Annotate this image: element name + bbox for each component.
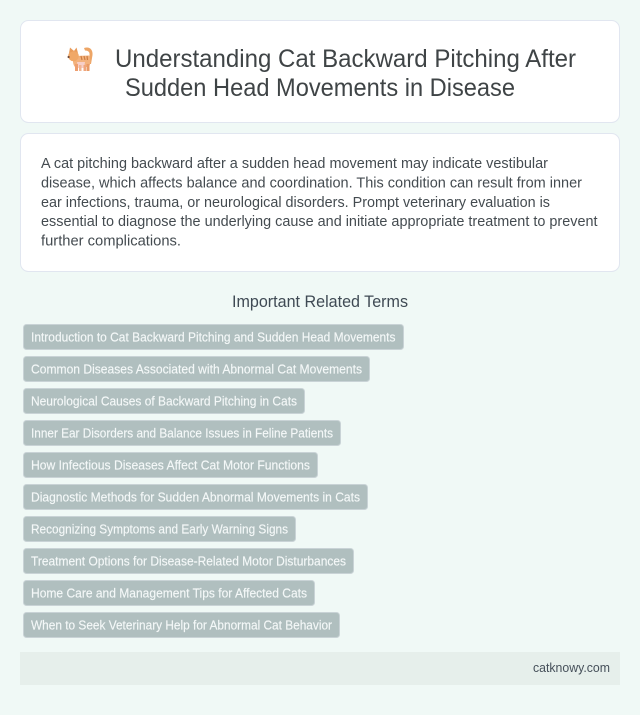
- term 8: Treatment Options for Disease-Related Motor Disturbances: [31, 554, 346, 568]
- term 10: [24, 612, 340, 638]
- term 5: How Infectious Diseases Affect Cat Motor Functions: [31, 458, 310, 472]
- text block: description: essential to diagnose the underlying cause and initiate appropriate treatment to prevent: [41, 213, 598, 230]
- icon: orange cat: [68, 47, 93, 71]
- term 6: Diagnostic Methods for Sudden Abnormal Movements in Cats: [31, 490, 360, 504]
- term 10: When to Seek Veterinary Help for Abnormal Cat Behavior: [31, 618, 333, 632]
- term 6: [24, 484, 368, 510]
- list: related terms: [24, 324, 404, 638]
- panel: title card: [20, 20, 620, 122]
- term 7: [24, 516, 296, 542]
- text block: description: A cat pitching backward after a sudden head movement may indicate vestibular: [41, 155, 548, 172]
- title: Sudden Head Movements in Disease: [125, 74, 515, 102]
- title: [115, 45, 576, 102]
- term 1: [24, 324, 404, 350]
- term 4: [24, 420, 340, 446]
- text block: description: ear infections, trauma, or neurological disorders. Prompt veterinary evaluation is: [41, 194, 550, 211]
- term 3: [24, 388, 304, 414]
- term 7: Recognizing Symptoms and Early Warning Signs: [31, 522, 288, 536]
- term 9: Home Care and Management Tips for Affected Cats: [31, 586, 307, 600]
- panel: description: [20, 134, 620, 272]
- term 8: [24, 548, 354, 574]
- footer source text: catknowy.com: [533, 660, 610, 675]
- term 2: [24, 356, 370, 382]
- text block: description: further complications.: [41, 232, 181, 250]
- footer: [20, 652, 620, 685]
- title: Understanding Cat Backward Pitching After: [115, 45, 576, 73]
- term 1: Introduction to Cat Backward Pitching and Sudden Head Movements: [31, 330, 396, 344]
- term 3: Neurological Causes of Backward Pitching in Cats: [31, 394, 297, 408]
- term 5: [24, 452, 318, 478]
- text block: description: disease, which affects balance and coordination. This condition can result from inner: [41, 174, 582, 192]
- term 2: Common Diseases Associated with Abnormal Cat Movements: [31, 362, 362, 376]
- term 4: Inner Ear Disorders and Balance Issues in Feline Patients: [31, 426, 333, 440]
- term 9: [24, 580, 314, 606]
- heading: related terms: Important Related Terms: [232, 293, 408, 311]
- text block: description: [41, 155, 598, 250]
